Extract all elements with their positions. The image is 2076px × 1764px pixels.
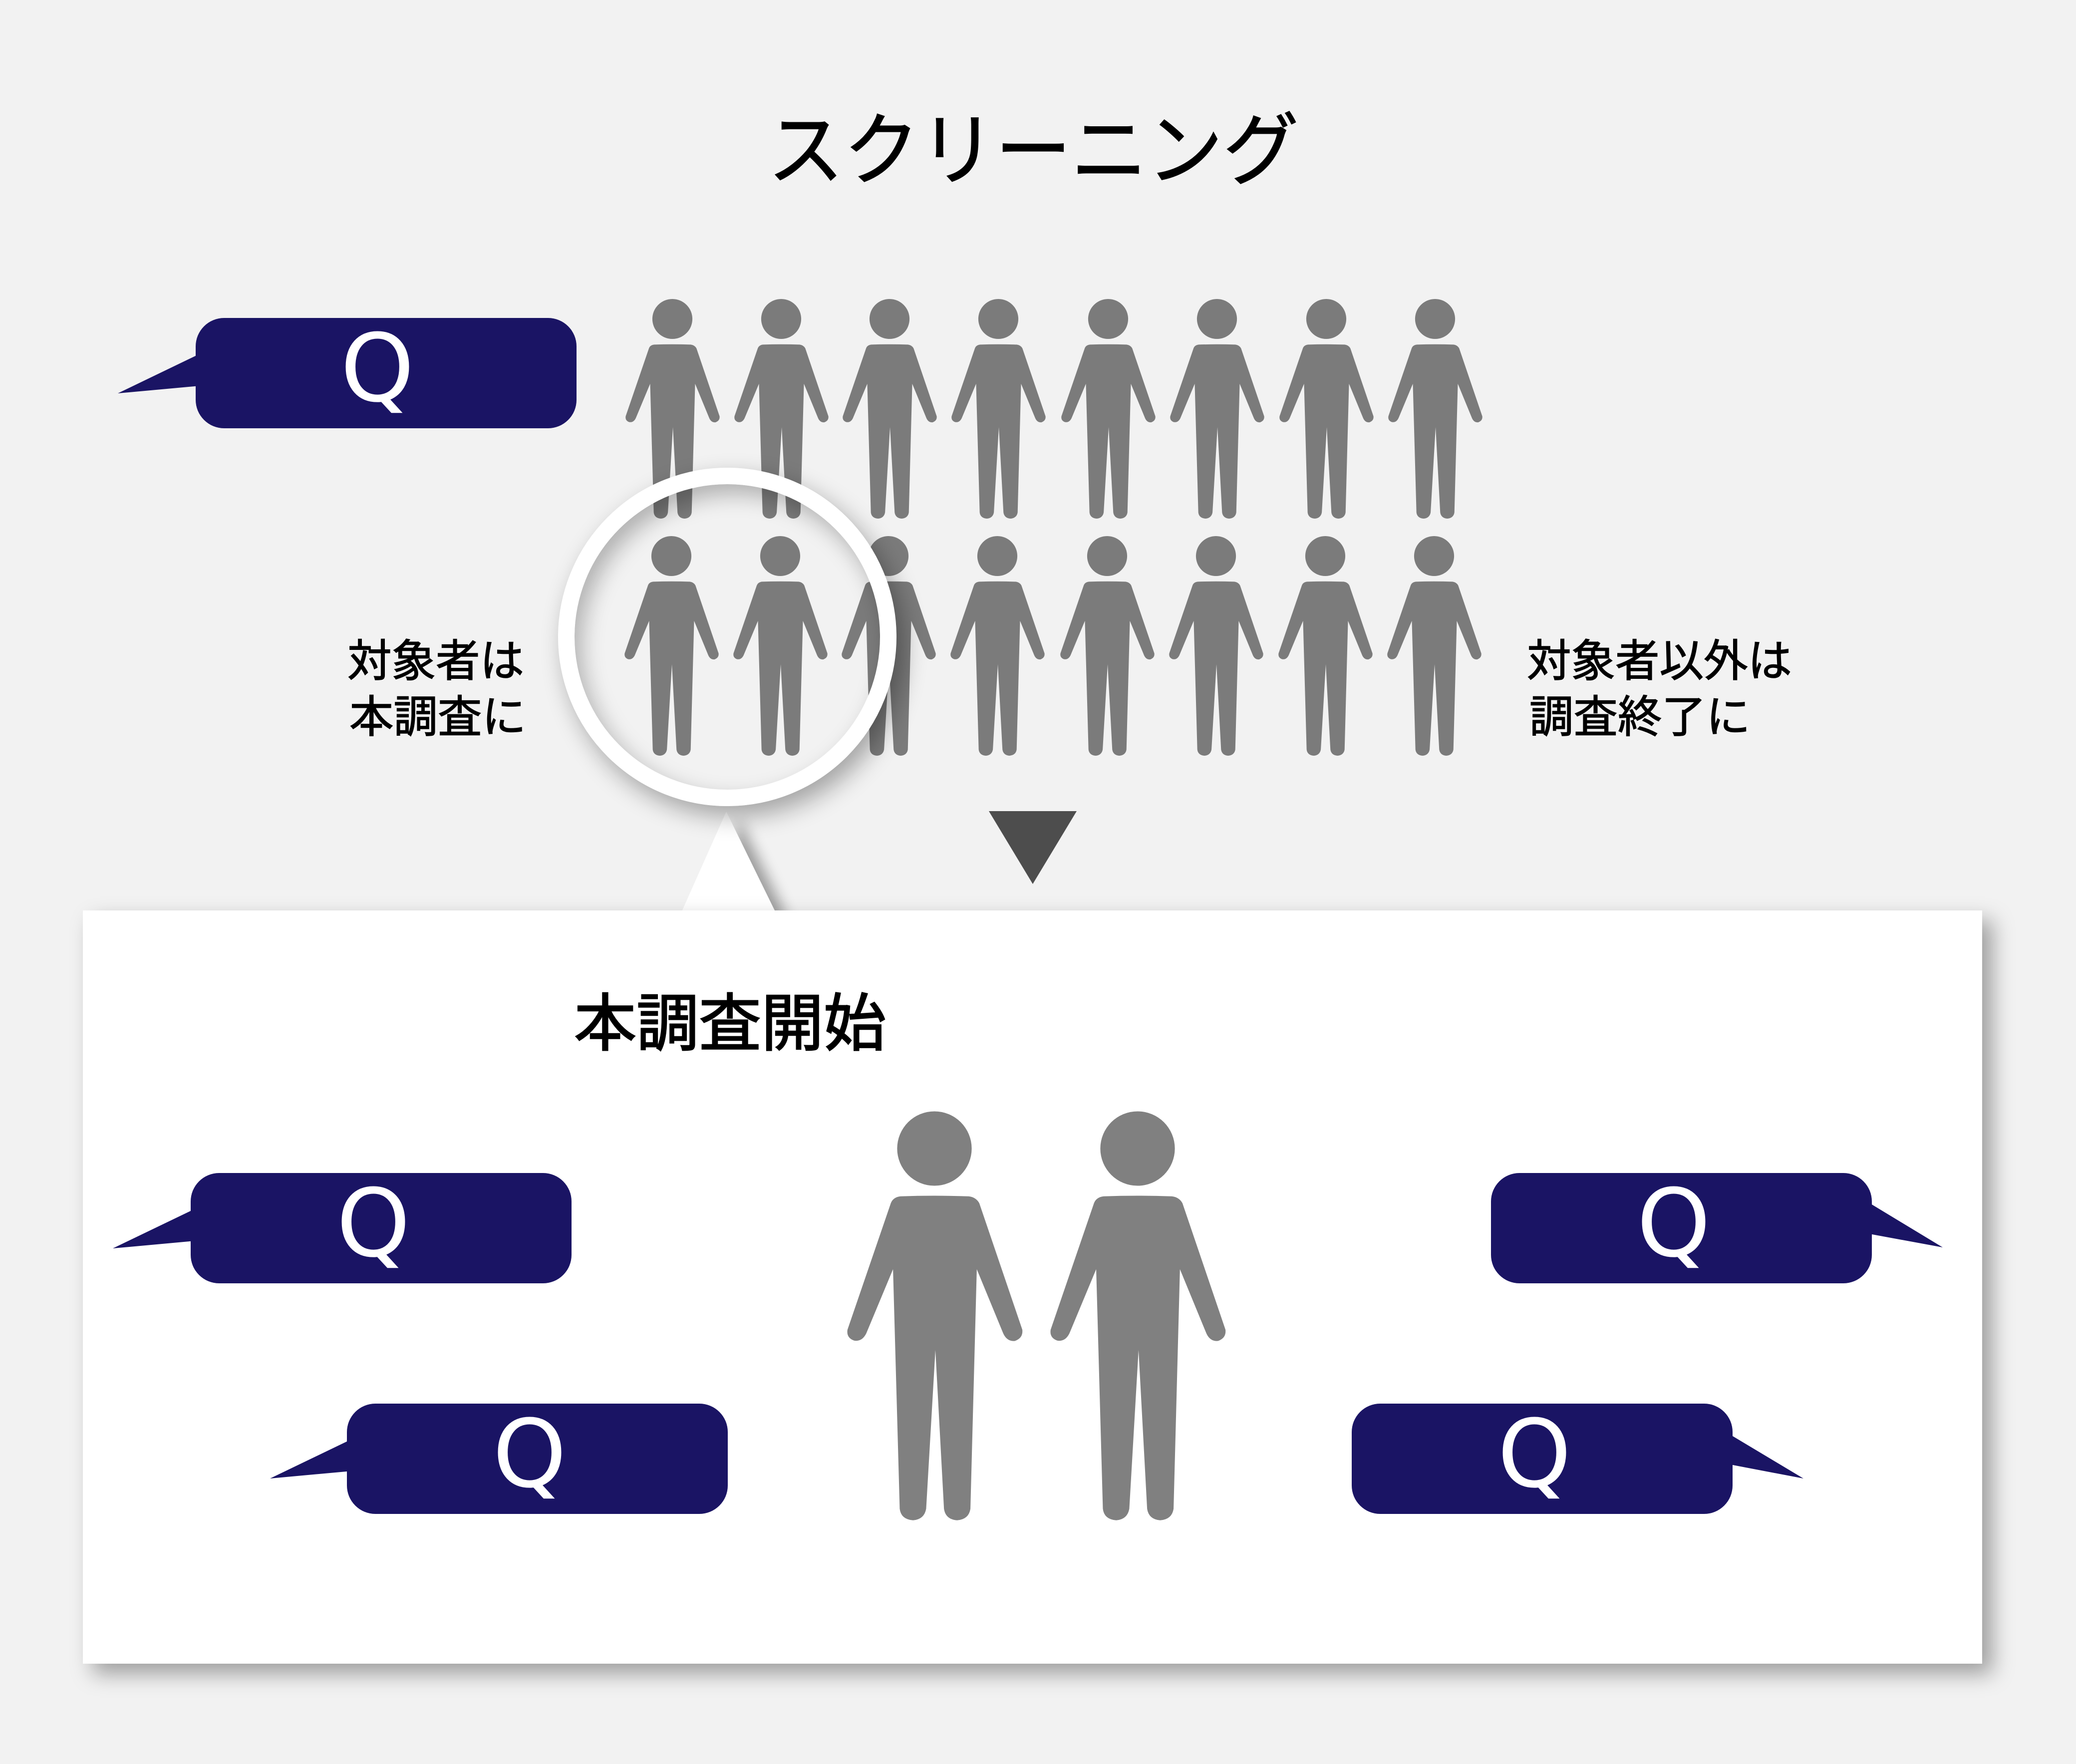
callout pointer bbox=[681, 812, 776, 912]
label: others end survey bbox=[1527, 625, 1792, 745]
callout pointer shadow bbox=[719, 819, 789, 921]
label: targets proceed to main survey bbox=[347, 625, 526, 745]
speech bubble: upper left bbox=[113, 1169, 572, 1283]
speech bubble: lower left bbox=[270, 1400, 728, 1514]
speech bubble: upper left: Q bbox=[336, 1169, 410, 1278]
arrow: down triangle bbox=[989, 811, 1077, 884]
icon: large person right bbox=[1050, 1111, 1225, 1520]
speech bubble: lower right: Q bbox=[1497, 1400, 1571, 1509]
label: targets proceed to main survey: 対象者は bbox=[347, 625, 524, 689]
speech bubble: screening question bbox=[118, 314, 577, 428]
panel: main survey bbox=[83, 910, 1982, 1664]
title: スクリーニング bbox=[768, 86, 1299, 201]
label: others end survey: 調査終了に bbox=[1529, 681, 1751, 745]
speech bubble: screening question: Q bbox=[340, 314, 414, 423]
speech bubble: lower right bbox=[1352, 1400, 1803, 1514]
speech bubble: upper right bbox=[1491, 1169, 1943, 1283]
label: others end survey: 対象者以外は bbox=[1527, 625, 1792, 689]
icon: large person left bbox=[847, 1111, 1022, 1520]
label: targets proceed to main survey: 本調査に bbox=[349, 681, 526, 745]
speech bubble: upper right: Q bbox=[1637, 1169, 1711, 1278]
panel heading: 本調査開始 bbox=[574, 973, 886, 1063]
icon group: first row of people bbox=[625, 299, 1483, 519]
icon group: second row of people bbox=[624, 536, 1482, 756]
magnifier ring bbox=[558, 468, 896, 806]
speech bubble: lower left: Q bbox=[493, 1400, 567, 1509]
